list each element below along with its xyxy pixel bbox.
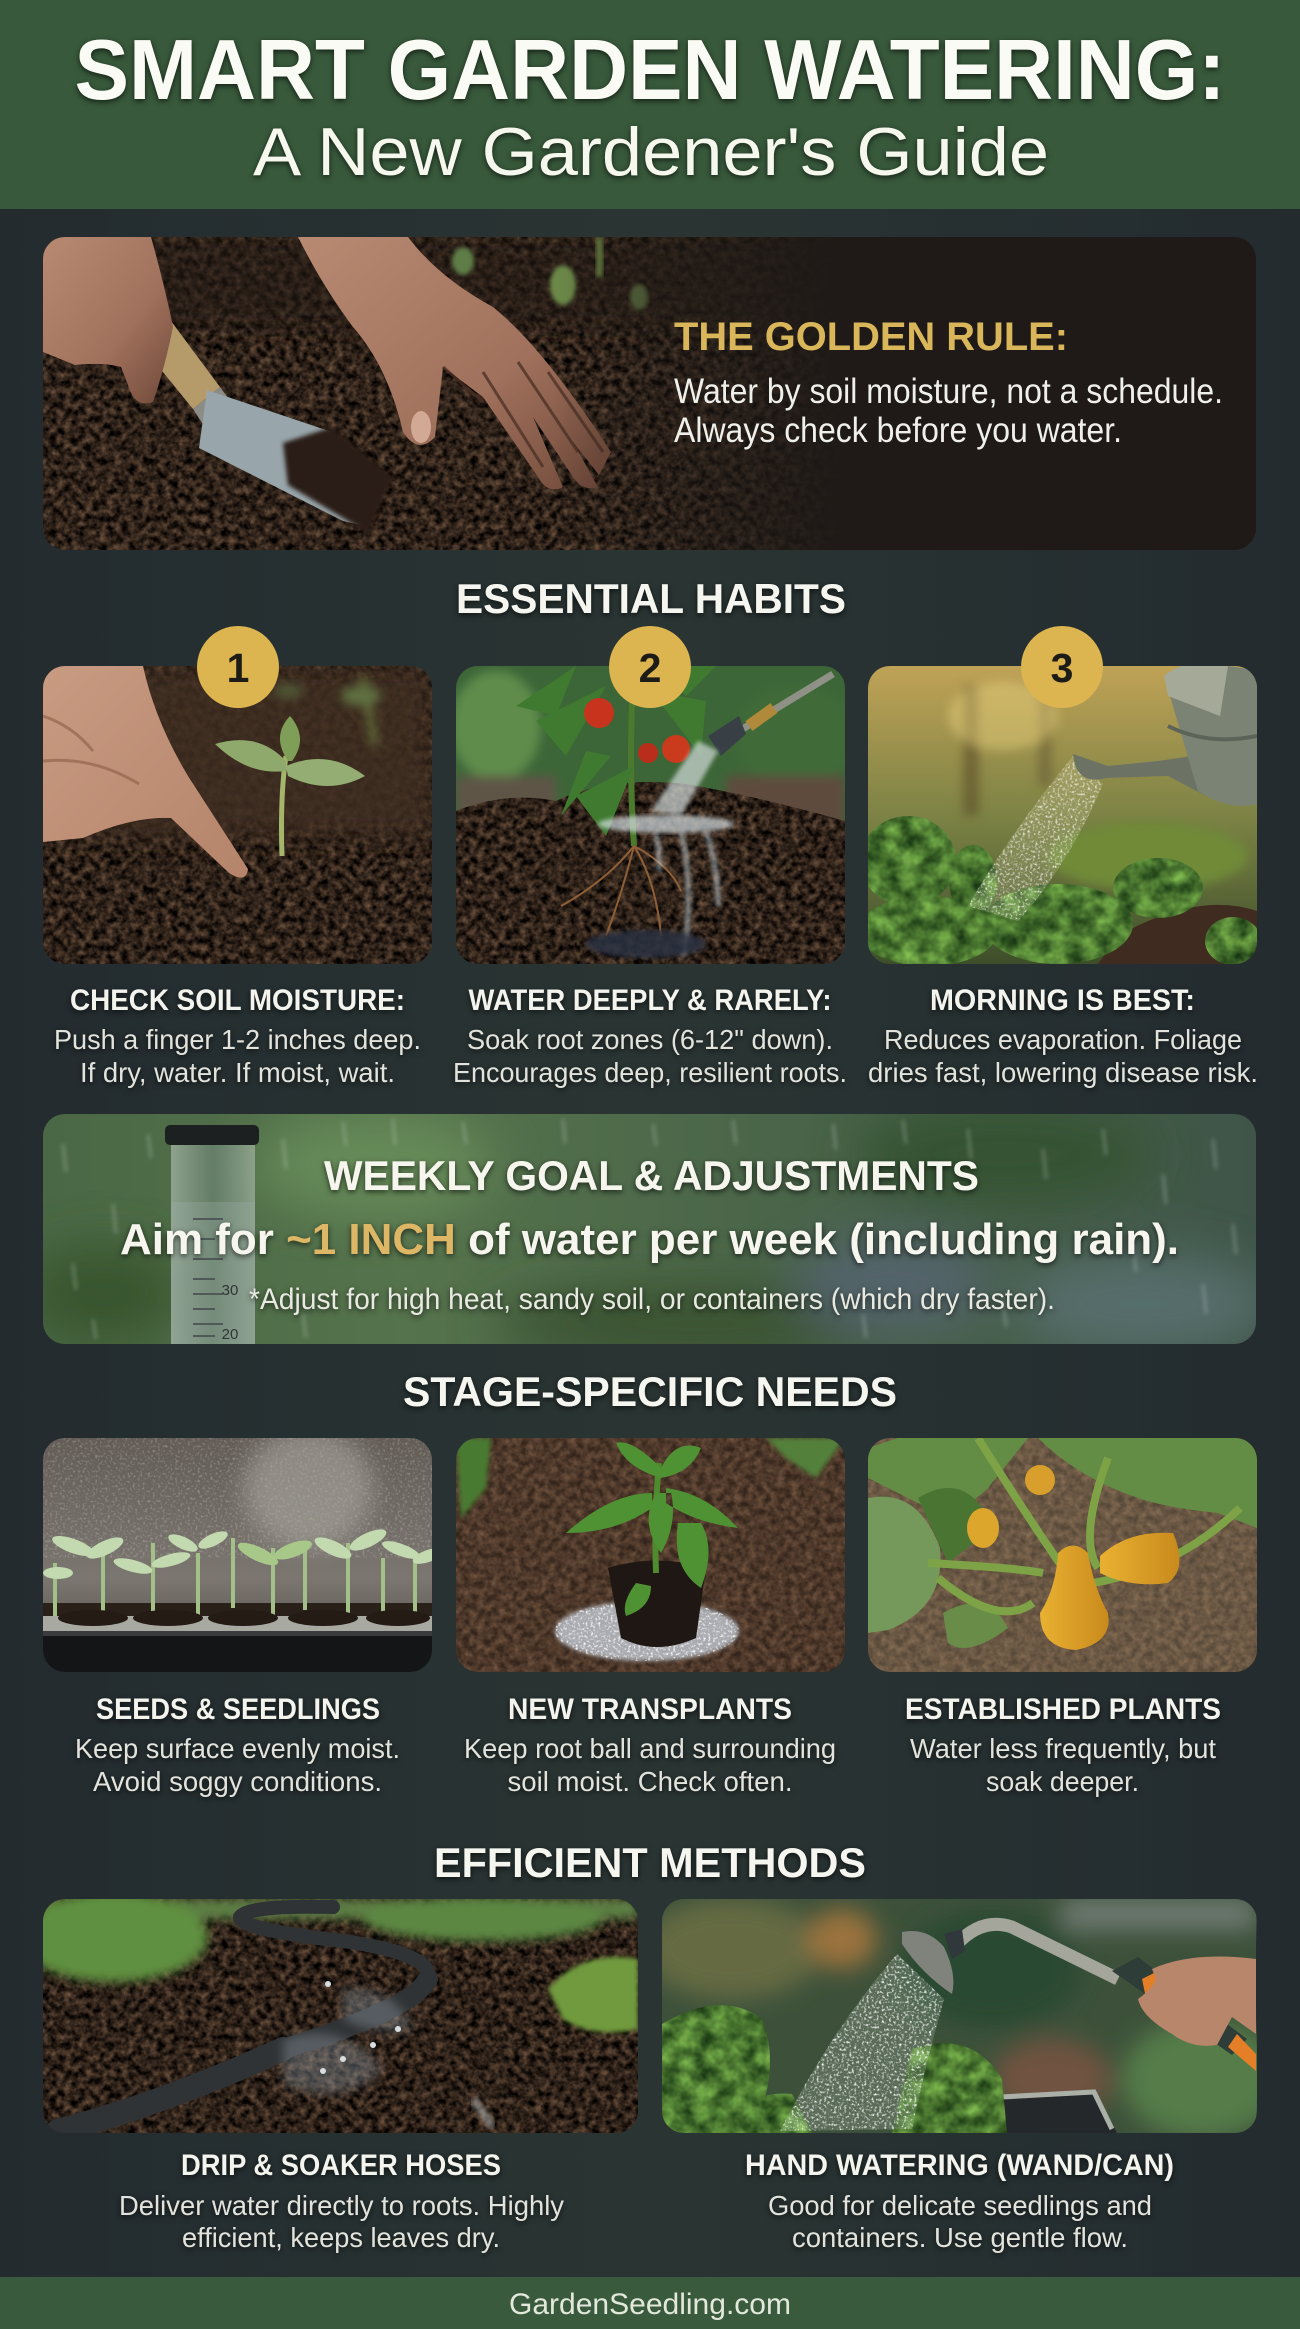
text: water deeply: Soak root zones (6-12" down). bbox=[467, 1024, 833, 1055]
text: drip and soaker hoses: DRIP & SOAKER HOSES bbox=[181, 2149, 501, 2182]
text: morning is best: Reduces evaporation. Foliage bbox=[884, 1024, 1242, 1055]
text: check soil moisture bbox=[54, 984, 421, 1088]
text: weekly goal bbox=[120, 1152, 1179, 1316]
icon: watering wand bbox=[902, 1924, 1256, 2071]
text: new transplants: soil moist. Check often. bbox=[508, 1766, 792, 1797]
icon: plants bbox=[662, 2005, 1007, 2133]
text: seeds and seedlings: Keep surface evenly moist. bbox=[75, 1733, 400, 1764]
icon: squash leaves bbox=[868, 1438, 1257, 1648]
icon: water drips bbox=[283, 1981, 493, 2127]
text: weekly goal: WEEKLY GOAL & ADJUSTMENTS bbox=[324, 1152, 979, 1199]
badge: step 3: 3 bbox=[1051, 645, 1073, 691]
text: seeds and seedlings: SEEDS & SEEDLINGS bbox=[96, 1693, 380, 1726]
footer: GardenSeedling.com bbox=[509, 2288, 791, 2321]
panel: established plants photo bbox=[868, 1438, 1257, 1672]
title: A New Gardener's Guide bbox=[253, 114, 1049, 190]
text: seeds and seedlings bbox=[75, 1693, 400, 1797]
text: morning is best bbox=[868, 984, 1258, 1088]
icon: rain gauge: 20 bbox=[222, 1326, 238, 1343]
text: water deeply bbox=[453, 984, 847, 1088]
callout text: THE GOLDEN RULE: bbox=[674, 315, 1068, 359]
panel: drip and soaker hose photo bbox=[18, 1892, 638, 2133]
badge: step 1: 1 bbox=[227, 645, 249, 691]
text: drip and soaker hoses: Deliver water directly to roots. Highly bbox=[119, 2190, 564, 2221]
header banner bbox=[0, 0, 1300, 209]
icon: vines bbox=[928, 1438, 1240, 1611]
text: drip and soaker hoses: efficient, keeps leaves dry. bbox=[182, 2222, 500, 2253]
icon: water pool bbox=[555, 1601, 739, 1661]
icon: container bbox=[932, 2094, 1117, 2133]
text: check soil moisture: If dry, water. If moist, wait. bbox=[80, 1057, 395, 1088]
text: new transplants: Keep root ball and surrounding bbox=[464, 1733, 836, 1764]
heading: efficient methods: EFFICIENT METHODS bbox=[434, 1839, 866, 1886]
icon: seedlings bbox=[43, 1525, 445, 1618]
panel: water deeply photo bbox=[451, 666, 856, 964]
icon: tomato plant bbox=[516, 666, 716, 846]
icon: rain gauge bbox=[165, 1125, 259, 1344]
icon: blurred greenery bbox=[18, 1892, 638, 1982]
icon: plants bbox=[858, 816, 1261, 966]
panel: the golden rule bbox=[43, 237, 1256, 550]
text: weekly goal: Aim for ~1 INCH of water per week (including rain). bbox=[120, 1215, 1179, 1264]
text: morning is best: dries fast, lowering disease risk. bbox=[868, 1057, 1258, 1088]
icon: soaker hose bbox=[58, 1907, 428, 2131]
text: water deeply: WATER DEEPLY & RARELY: bbox=[468, 984, 832, 1017]
heading: stage-specific needs: STAGE-SPECIFIC NEEDS bbox=[403, 1368, 897, 1415]
panel: seeds and seedlings photo bbox=[43, 1428, 445, 1672]
panel: new transplants photo bbox=[456, 1438, 845, 1672]
badge: step 2 bbox=[609, 626, 691, 708]
panel: hand watering photo bbox=[642, 1899, 1282, 2139]
icon: right hand bbox=[298, 237, 611, 489]
text: established plants: soak deeper. bbox=[986, 1766, 1139, 1797]
icon: trowel bbox=[141, 321, 393, 533]
panel: weekly goal and adjustments bbox=[23, 1104, 1273, 1364]
title bbox=[74, 23, 1226, 190]
icon: squash bbox=[967, 1465, 1179, 1650]
text: hand watering: Good for delicate seedlings and bbox=[768, 2190, 1152, 2221]
panel: morning is best photo bbox=[858, 663, 1261, 966]
badge: step 3 bbox=[1021, 626, 1103, 708]
text: morning is best: MORNING IS BEST: bbox=[930, 984, 1195, 1017]
icon: water spray bbox=[780, 1954, 944, 2131]
icon: rain gauge: 30 bbox=[222, 1282, 238, 1299]
text: drip and soaker hoses bbox=[119, 2149, 564, 2253]
text: established plants: ESTABLISHED PLANTS bbox=[905, 1693, 1221, 1726]
text: established plants bbox=[905, 1693, 1221, 1797]
panel: check soil moisture photo bbox=[43, 666, 432, 964]
icon: watering can bbox=[1073, 663, 1257, 806]
icon: pointing finger bbox=[43, 666, 248, 878]
icon: rain streaks bbox=[63, 1119, 1236, 1339]
text: hand watering bbox=[745, 2149, 1174, 2253]
text: check soil moisture: CHECK SOIL MOISTURE: bbox=[70, 984, 405, 1017]
text: weekly goal: *Adjust for high heat, sandy soil, or containers (which dry faster). bbox=[249, 1283, 1055, 1316]
text: seeds and seedlings: Avoid soggy conditions. bbox=[93, 1766, 382, 1797]
text: water deeply: Encourages deep, resilient roots. bbox=[453, 1057, 847, 1088]
text: hand watering: HAND WATERING (WAND/CAN) bbox=[745, 2149, 1174, 2182]
icon: seedling bbox=[215, 716, 365, 856]
badge: step 2: 2 bbox=[639, 645, 661, 691]
callout text: Always check before you water. bbox=[674, 411, 1122, 450]
callout text: Water by soil moisture, not a schedule. bbox=[674, 372, 1223, 411]
icon: roots bbox=[561, 846, 681, 936]
title: SMART GARDEN WATERING: bbox=[74, 23, 1226, 118]
icon: hand bbox=[1138, 1957, 1256, 2046]
text: established plants: Water less frequently, but bbox=[910, 1733, 1216, 1764]
icon: left hand bbox=[43, 237, 173, 404]
footer bbox=[0, 2277, 1300, 2329]
text: hand watering: containers. Use gentle flow. bbox=[792, 2222, 1128, 2253]
callout text bbox=[674, 315, 1223, 450]
icon: seed tray bbox=[43, 1610, 432, 1672]
icon: hose and spray bbox=[586, 674, 833, 958]
heading: essential habits: ESSENTIAL HABITS bbox=[456, 575, 846, 622]
icon: transplant plant bbox=[566, 1442, 738, 1616]
icon: water spray bbox=[968, 756, 1103, 921]
text: new transplants: NEW TRANSPLANTS bbox=[508, 1693, 792, 1726]
badge: step 1 bbox=[197, 626, 279, 708]
text: new transplants bbox=[464, 1693, 836, 1797]
icon: root ball bbox=[608, 1560, 706, 1647]
text: check soil moisture: Push a finger 1-2 inches deep. bbox=[54, 1024, 421, 1055]
